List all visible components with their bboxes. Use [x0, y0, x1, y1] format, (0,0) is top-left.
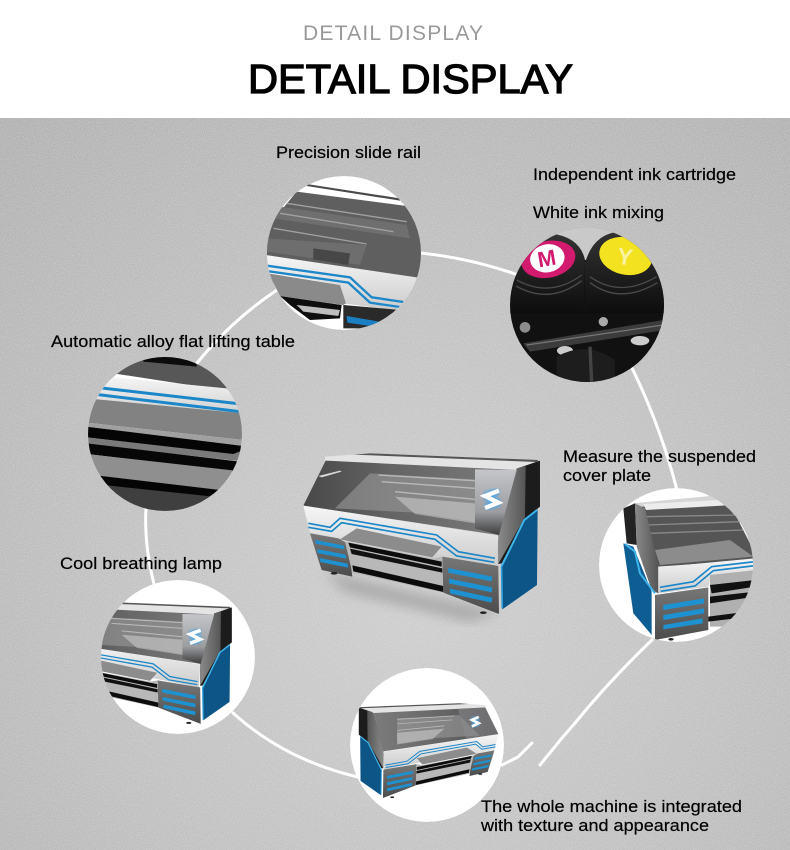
- circle: ink cartridges: [507, 228, 670, 387]
- circle: alloy flat lifting table: [87, 355, 243, 513]
- circle: suspended cover plate: [599, 488, 755, 642]
- small grey heading: DETAIL DISPLAY: [303, 22, 483, 45]
- circle: ink cartridges: M: [535, 245, 558, 272]
- label: measure the suspended cover plate: cover plate: [563, 466, 651, 485]
- main heading: DETAIL DISPLAY: [248, 56, 573, 102]
- page header background: [0, 0, 790, 118]
- central printer machine: [303, 453, 540, 614]
- label: white ink mixing: White ink mixing: [533, 203, 664, 222]
- label: precision slide rail: Precision slide rail: [276, 143, 421, 162]
- circle: ink cartridges: Y: [615, 243, 635, 271]
- label: cool breathing lamp: Cool breathing lamp: [60, 554, 222, 573]
- label: whole machine texture and appearance: The whole machine is integrated: [481, 797, 742, 816]
- circle: cool breathing lamp: [101, 580, 255, 734]
- machine shadow: [325, 572, 500, 622]
- label: measure the suspended cover plate: [563, 447, 756, 485]
- connecting ring: [146, 253, 677, 777]
- label: measure the suspended cover plate: Measure the suspended: [563, 447, 756, 466]
- circle: whole machine: [350, 668, 504, 822]
- label: whole machine texture and appearance: with texture and appearance: [480, 816, 709, 835]
- label: independent ink cartridge: Independent ink cartridge: [533, 165, 736, 184]
- label: automatic alloy flat lifting table: Automatic alloy flat lifting table: [51, 332, 295, 351]
- label: whole machine texture and appearance: [480, 797, 742, 835]
- circle: precision slide rail: [265, 176, 423, 330]
